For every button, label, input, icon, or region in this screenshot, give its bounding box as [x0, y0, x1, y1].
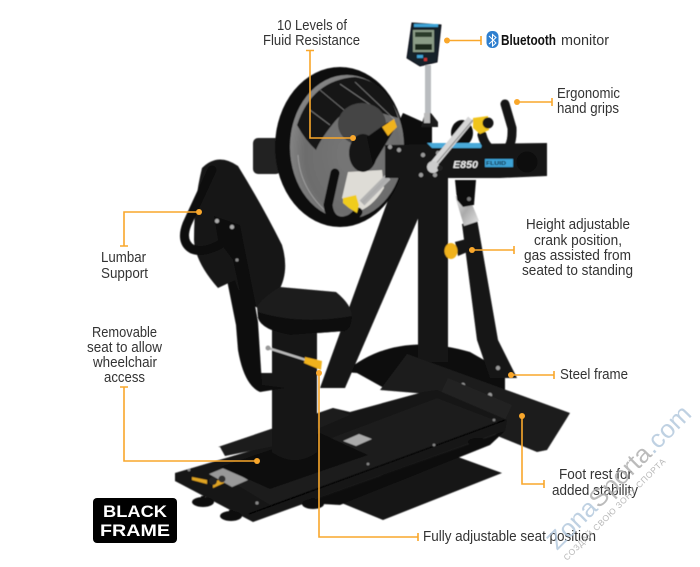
monitor [407, 23, 441, 66]
callout: 10 levels of fluid resistance [263, 17, 360, 141]
central column [418, 176, 448, 362]
feet [192, 438, 488, 521]
upper yellow grip collar [473, 116, 494, 134]
callout: bluetooth monitor: monitor [561, 32, 609, 49]
callout: 10 levels of fluid resistance: 10 Levels of [277, 17, 348, 34]
base rail [175, 390, 507, 522]
callout: steel frame [508, 366, 628, 383]
diagonal leg [320, 178, 420, 388]
badge: black frame [93, 498, 177, 543]
callout: removable seat: Removable [92, 324, 157, 341]
lower left grip [328, 173, 358, 221]
fluid logo: FLUID [486, 161, 507, 167]
callout: ergonomic hand grips: hand grips [557, 100, 619, 117]
callout: height adjustable crank [469, 216, 633, 279]
machine: upper body exercise bike [175, 23, 570, 522]
underside between rail and foot plate [305, 431, 505, 505]
monitor stem [421, 65, 438, 127]
fluid logo [485, 159, 513, 167]
icon: bluetooth [486, 31, 498, 48]
callout: height adjustable crank: gas assisted from [524, 247, 631, 264]
upper crank chrome [427, 119, 473, 173]
fluid resistance wheel [275, 67, 405, 227]
lumbar handle [184, 170, 224, 250]
seat adjust pin [266, 346, 322, 370]
backrest [194, 159, 285, 308]
callout: lumbar support [101, 209, 202, 282]
foot rest [380, 354, 570, 452]
callout: height adjustable crank: crank position, [534, 232, 622, 249]
main beam [385, 143, 547, 178]
badge: black frame: BLACK [103, 502, 168, 521]
badge: black frame: FRAME [100, 521, 170, 540]
backrest bracket [214, 216, 256, 306]
callout: fully adjustable seat: Fully adjustable seat position [423, 528, 596, 545]
model name: E850 [453, 159, 478, 171]
left nub [253, 138, 281, 174]
callout: ergonomic hand grips [514, 85, 620, 117]
seat post [261, 330, 317, 460]
callout: foot rest [519, 413, 638, 499]
backrest arm [215, 220, 285, 392]
callout: fully adjustable seat [316, 370, 596, 545]
callout: height adjustable crank: Height adjustable [526, 216, 630, 233]
lower left chrome crank [343, 177, 388, 213]
callout: removable seat: access [104, 369, 145, 386]
callout: 10 levels of fluid resistance: Fluid Resistance [263, 32, 360, 49]
rear body housing [385, 113, 432, 150]
callout: bluetooth monitor [444, 31, 609, 49]
crank disk [451, 120, 473, 146]
seat plate [220, 433, 368, 489]
watermark: СОЗДАЙ СВОЮ ЗОНУ СПОРТА [561, 455, 668, 562]
callout: height adjustable crank: seated to standing [522, 262, 633, 279]
callout: removable seat: wheelchair [92, 354, 157, 371]
left crank hub and arm [349, 119, 397, 172]
rear base arch [345, 344, 505, 392]
watermark: ZonaSporta.com [541, 400, 697, 555]
seat [257, 287, 352, 335]
upper right hand grip [482, 104, 512, 152]
callout: foot rest: added stability [552, 482, 638, 499]
front foot plate [327, 453, 502, 520]
callout: ergonomic hand grips: Ergonomic [557, 85, 620, 102]
icon: height adjust knob [444, 243, 458, 259]
callout: removable seat: seat to allow [87, 339, 162, 356]
callout: foot rest: Foot rest for [559, 466, 632, 483]
callout: lumbar support: Lumbar [101, 249, 146, 266]
callout: lumbar support: Support [101, 265, 149, 282]
rear strut [455, 180, 517, 378]
callout: bluetooth monitor: Bluetooth [501, 32, 556, 49]
callout: removable seat [87, 324, 260, 464]
callout: steel frame: Steel frame [560, 366, 628, 383]
